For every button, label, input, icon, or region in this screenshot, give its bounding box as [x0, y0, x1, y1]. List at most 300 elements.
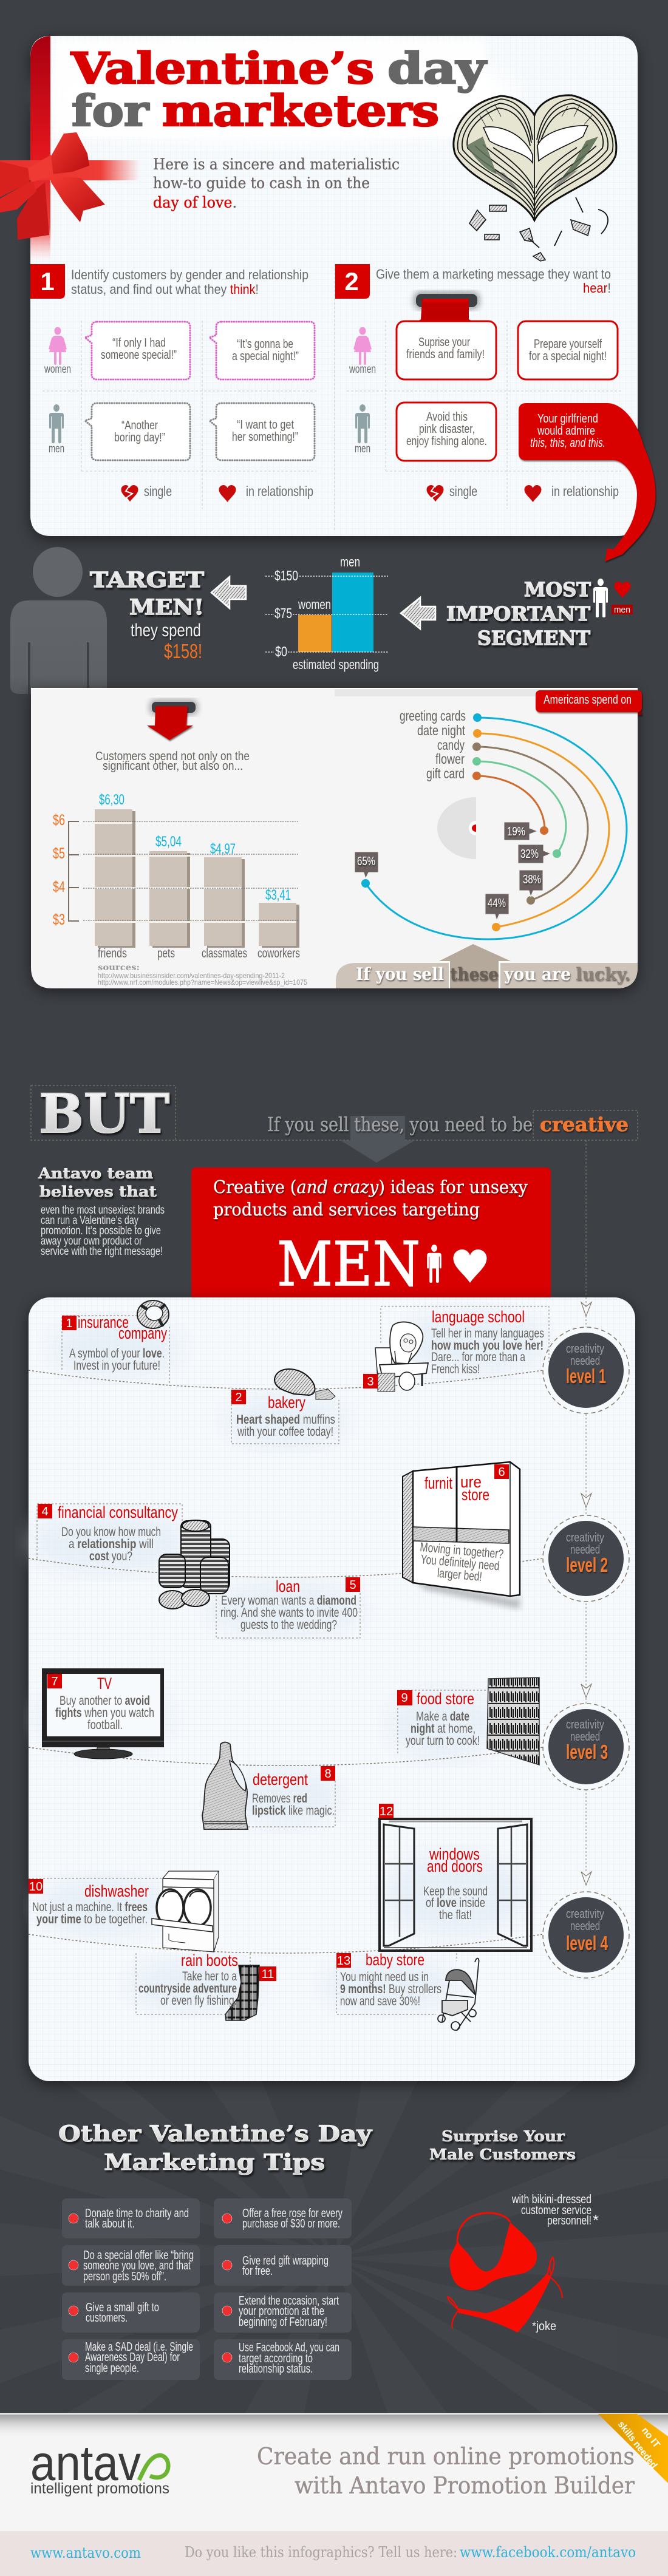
idea 10: dishwasher	[29, 1871, 219, 1952]
heading: target men: MEN!	[129, 595, 204, 620]
step text: hear!	[583, 280, 611, 296]
legend in relationship	[219, 483, 313, 502]
idea 1: insurance company: company	[118, 1324, 167, 1342]
idea 5: loan: 5	[349, 1579, 356, 1592]
text: antavo team: promotion. It’s possible to give	[41, 1225, 161, 1237]
tip cards: Extend the occasion, start	[239, 2294, 339, 2308]
speech bubble: “If only I had	[112, 336, 166, 350]
title: day	[387, 43, 488, 93]
section: but	[31, 1082, 638, 1300]
arc legend: candy	[437, 737, 465, 753]
speech bubble	[210, 403, 315, 460]
arrow: left	[401, 597, 435, 629]
tip cards: purchase of $30 or more.	[242, 2217, 340, 2231]
heading: most important segment	[446, 578, 591, 650]
bar chart: estimated spending	[265, 554, 388, 672]
speech bubble	[210, 322, 315, 379]
right half	[336, 690, 642, 988]
bar chart: estimated spending: men	[340, 554, 360, 569]
idea 7: tv: 7	[51, 1675, 58, 1688]
idea 4: financial consultancy: financial consultancy	[58, 1503, 178, 1521]
message box: enjoy fishing alone.	[406, 435, 487, 448]
tip cards: Offer a free rose for every	[242, 2207, 343, 2220]
idea 8: detergent: 8	[324, 1767, 332, 1781]
level 1: needed	[570, 1354, 600, 1368]
footer: links	[0, 2531, 668, 2576]
text: create and run	[257, 2443, 635, 2499]
banner: if you sell these: If you sell	[356, 964, 444, 984]
idea 12: windows and doors: the flat!	[439, 1908, 472, 1922]
icon: wardrobe	[403, 1462, 520, 1609]
banner: if you sell these: lucky.	[576, 964, 630, 984]
arc legend: date night	[417, 722, 465, 738]
bar chart: spending: pets	[157, 946, 175, 960]
title: for	[72, 86, 149, 136]
step text: Identify customers by gender and relationship	[71, 267, 308, 282]
text: customers spend	[95, 750, 250, 773]
legend single: single	[144, 483, 172, 499]
tip cards: Use Facebook Ad, you can	[239, 2341, 339, 2354]
icon: money heart	[454, 95, 616, 261]
message box	[397, 403, 496, 461]
speech bubble: her something!”	[232, 430, 298, 444]
idea 2: bakery: 2	[235, 1391, 242, 1404]
panel: creative ideas	[29, 1297, 635, 2081]
heading: surprise: Surprise Your	[441, 2127, 565, 2145]
icon: man	[49, 404, 64, 455]
icon: dishwasher	[152, 1871, 219, 1952]
text: create and run: with Antavo Promotion Builder	[295, 2472, 635, 2499]
step number	[335, 264, 370, 299]
footer: links: www.antavo.com	[30, 2544, 141, 2561]
level 3: needed	[570, 1730, 600, 1744]
bar chart: spending: $3,41	[265, 887, 291, 903]
icon: man: men	[49, 443, 64, 455]
text: customers spend: Customers spend not only on the	[95, 750, 250, 763]
idea 3: language school: Tell her in many languages	[431, 1327, 544, 1341]
icon: boot	[225, 1965, 259, 2020]
subtitle text: day of love.	[153, 194, 237, 211]
level 2: creativity	[566, 1531, 604, 1545]
subtitle text: Here is a sincere and materialistic	[153, 155, 400, 173]
idea 2: bakery: Heart shaped muffins	[236, 1413, 335, 1427]
icon: television	[42, 1668, 164, 1759]
bar chart: estimated spending: $75	[274, 605, 292, 621]
tip cards: person gets 50% off”.	[83, 2270, 166, 2283]
message box: Avoid this	[426, 410, 468, 424]
bar chart: spending: $5,04	[155, 834, 182, 850]
level 1: level 1	[566, 1365, 606, 1387]
step number	[30, 264, 65, 299]
idea 9: food store: 9	[401, 1691, 408, 1705]
idea 11: rain boots: rain boots	[181, 1951, 238, 1969]
step text: status, and find out what they think!	[71, 282, 259, 297]
arc chart	[366, 718, 627, 939]
heading: target men	[90, 568, 204, 662]
idea 3: language school: French kiss!	[431, 1362, 480, 1376]
tip cards: relationship status.	[239, 2362, 313, 2376]
ribbon vertical	[30, 36, 50, 261]
callouts: percentages: 19%	[507, 825, 525, 838]
legend single	[121, 483, 172, 503]
message box: pink disaster,	[419, 423, 475, 436]
arc legend: flower	[435, 751, 465, 767]
text: bikini: personnel!	[547, 2214, 591, 2228]
tip cards: for free.	[242, 2265, 273, 2278]
tip cards: single people.	[85, 2362, 139, 2375]
idea 11: rain boots: or even fly fishing.	[160, 1994, 237, 2008]
message box: friends and family!	[406, 348, 485, 361]
idea 3: language school: how much you love her!	[431, 1339, 544, 1353]
step 1: 1	[40, 267, 55, 296]
bar chart: spending: classmates	[202, 946, 247, 960]
arrow: big red curved arrow with message	[519, 403, 655, 562]
panel background	[30, 36, 638, 536]
arrow: big red curved arrow with message: Your girlfriend	[537, 412, 598, 426]
message box: for a special night!	[529, 350, 607, 363]
heading: surprise: Male Customers	[429, 2146, 576, 2163]
corner ribbon: no IT	[639, 2425, 662, 2450]
idea 4: financial consultancy: a relationship will	[69, 1537, 154, 1551]
callouts: percentages: 44%	[488, 897, 506, 910]
idea 9: food store	[397, 1677, 539, 1765]
half disc	[437, 797, 476, 859]
idea 1: insurance company: 1	[66, 1317, 73, 1330]
idea 3: language school: Dare... for more than a	[431, 1350, 525, 1364]
idea 1: insurance company: Invest in your future!	[73, 1359, 160, 1373]
tip cards: someone you love, and that	[83, 2259, 191, 2272]
idea 1: insurance company: A symbol of your love.	[69, 1347, 165, 1361]
footer: links: www.facebook.com/antavo	[460, 2544, 636, 2561]
idea 8: detergent: Removes red	[252, 1792, 307, 1806]
ribbon slot	[414, 291, 480, 322]
text: antavo team: service with the right message!	[41, 1245, 163, 1258]
speech bubble	[85, 403, 190, 460]
tip cards: Donate time to charity and	[85, 2207, 189, 2220]
icon: coins	[159, 1520, 230, 1609]
bar chart: estimated spending: $150	[274, 568, 298, 583]
level 3: level 3	[566, 1741, 608, 1763]
title: Valentine’s	[70, 43, 374, 93]
arrow: big red curved arrow with message: would admire	[537, 424, 595, 438]
level 2: level 2	[566, 1554, 608, 1576]
arc legend: greeting cards	[400, 708, 466, 724]
tip cards: Awareness Day Deal) for	[85, 2351, 180, 2364]
bar chart: spending: $6	[53, 812, 65, 829]
arrow: down	[340, 1116, 415, 1163]
legend single: single	[449, 483, 477, 499]
idea 6: furniture store	[403, 1462, 520, 1609]
callout: americans spend on	[536, 690, 642, 715]
footer: promotion	[0, 2413, 668, 2531]
idea 11: rain boots: Take her to a	[182, 1969, 237, 1983]
bar chart: spending: friends	[98, 946, 127, 960]
idea 9: food store: food store	[417, 1690, 474, 1708]
icon: ribbon bow	[0, 132, 140, 240]
panel: creative ideas red box: products and services targeting	[213, 1199, 480, 1220]
level 3: creativity	[566, 1718, 604, 1731]
idea 6: furniture store: Moving in together?	[420, 1540, 504, 1562]
idea 2: bakery	[231, 1369, 339, 1444]
subtitle text: how-to guide to cash in on the	[153, 174, 370, 192]
arrow: left	[211, 577, 246, 608]
callouts: percentages: 38%	[523, 873, 541, 886]
idea 13: baby store: 9 months! Buy strollers	[340, 1982, 441, 1996]
idea 5: loan	[216, 1577, 360, 1638]
legend in relationship: in relationship	[551, 483, 619, 499]
idea 11: rain boots	[136, 1951, 276, 2020]
arrow: big red curved arrow with message: this, this, and this.	[530, 437, 605, 450]
text: bikini	[511, 2193, 599, 2333]
idea 9: food store: night at home,	[411, 1722, 475, 1736]
banner: if you sell these	[336, 944, 638, 988]
idea 2: bakery: bakery	[268, 1393, 305, 1412]
message box	[518, 321, 618, 379]
idea 7: tv: football.	[87, 1718, 123, 1732]
message box	[397, 321, 496, 379]
footer: links: Do you like this infographics? Tell us here:	[185, 2544, 457, 2561]
panel: marketing tips	[58, 2121, 372, 2380]
bar chart: estimated spending: $0	[275, 644, 287, 659]
bar chart: spending: $4,97	[210, 841, 236, 857]
idea 5: loan: loan	[276, 1577, 300, 1596]
corner ribbon	[598, 2414, 668, 2483]
dashed matrix	[43, 321, 316, 509]
idea 13: baby store: 13	[337, 1954, 350, 1968]
text: antavo team: Antavo team	[38, 1164, 153, 1182]
subtitle text	[153, 155, 400, 211]
level 1	[543, 1327, 629, 1413]
idea 6: furniture store: larger bed!	[437, 1566, 483, 1584]
icon: life ring	[137, 1300, 169, 1328]
idea 8: detergent	[202, 1742, 335, 1829]
idea 13: baby store: baby store	[366, 1951, 424, 1969]
logo: antavo: intelligent promotions	[30, 2480, 169, 2497]
idea 10: dishwasher: Not just a machine. It frees	[32, 1900, 148, 1914]
idea 6: furniture store: 6	[498, 1466, 505, 1479]
speech bubble	[85, 322, 190, 379]
step text	[71, 267, 308, 297]
callout: americans spend on: Americans spend on	[544, 693, 632, 707]
speech bubble: boring day!”	[114, 431, 165, 444]
idea 9: food store: Make a date	[416, 1710, 469, 1724]
heading: other tips: Marketing Tips	[104, 2150, 325, 2175]
idea 11: rain boots: 11	[262, 1968, 274, 1981]
text: sources: http://www.nrf.com/modules.php?name=News&op=viewlive&sp_id=1075	[98, 978, 307, 987]
arc legend	[361, 708, 561, 931]
arc legend: gift card	[426, 766, 465, 781]
level 4: needed	[570, 1920, 600, 1933]
heading: target men: $158!	[164, 640, 202, 662]
tip cards: target according to	[239, 2352, 313, 2365]
heading: but: BUT	[39, 1082, 169, 1145]
text: creative: If you sell these, you need to be	[267, 1113, 533, 1136]
text: antavo team: away your own product or	[41, 1235, 143, 1248]
heading: surprise	[429, 2127, 576, 2163]
tip cards: customers.	[86, 2311, 128, 2325]
icon: student at desk	[375, 1322, 428, 1392]
idea 3: language school: language school	[432, 1308, 525, 1326]
panel: spending	[31, 688, 642, 988]
heading: most important segment: MOST	[524, 578, 591, 601]
callouts: percentages: 32%	[520, 848, 539, 861]
panel: surprise male customers	[429, 2127, 599, 2333]
idea 1: insurance company	[62, 1300, 169, 1386]
idea 13: baby store	[336, 1951, 479, 2031]
icon: bikini	[448, 2213, 562, 2333]
speech bubble: someone special!”	[101, 348, 177, 362]
icon: detergent bottle	[202, 1742, 248, 1829]
text: creative: creative	[540, 1113, 629, 1136]
title: marketers	[162, 86, 439, 136]
icon: woman: women	[349, 363, 376, 376]
idea 4: financial consultancy: Do you know how much	[61, 1525, 161, 1539]
banner: if you sell these: these	[450, 964, 499, 984]
banner: if you sell these: you are	[503, 964, 571, 984]
heading: target men: TARGET	[90, 568, 204, 593]
idea 6: furniture store: store	[462, 1486, 489, 1504]
left half	[53, 699, 307, 987]
panel: creative ideas red box: Creative (and crazy) ideas for unsexy	[213, 1177, 528, 1197]
idea 6: furniture store: ure	[460, 1473, 482, 1491]
bar chart: estimated spending: women	[298, 597, 331, 612]
legend single	[426, 483, 477, 503]
message box: Suprise your	[418, 336, 470, 349]
speech bubble: a special night!”	[232, 350, 299, 363]
icon: woman	[44, 327, 71, 376]
bar chart: spending: $5	[53, 845, 65, 862]
text: sources: sources:	[98, 963, 140, 973]
legend in relationship	[525, 483, 619, 502]
heading: other tips	[58, 2121, 372, 2175]
panel: creative ideas red box	[191, 1167, 551, 1300]
idea 3: language school	[363, 1307, 549, 1392]
tip cards: Do a special offer like “bring	[83, 2249, 194, 2262]
text: customers spend: significant other, but also on...	[103, 760, 243, 773]
heading: target men: they spend	[131, 620, 201, 641]
logo: antavo: antav	[30, 2436, 141, 2491]
idea 8: detergent: lipstick like magic.	[252, 1804, 335, 1818]
idea 11: rain boots: countryside adventure	[138, 1982, 237, 1996]
idea 5: loan: Every woman wants a diamond	[221, 1594, 356, 1608]
icon: red ribbon arrow	[147, 699, 198, 740]
idea 7: tv	[42, 1668, 164, 1759]
text: sources	[98, 963, 307, 987]
bar chart: spending: coworkers	[257, 946, 300, 960]
text: bikini: customer service	[521, 2204, 591, 2217]
idea 6: furniture store: You definitely need	[420, 1552, 500, 1573]
tip cards	[62, 2198, 352, 2380]
idea 5: loan: guests to the wedding?	[240, 1618, 337, 1632]
message box: Prepare yourself	[534, 338, 602, 351]
level 4: level 4	[566, 1932, 608, 1954]
idea 10: dishwasher: your time to be together.	[36, 1912, 148, 1926]
level 4: creativity	[566, 1908, 604, 1921]
idea 2: bakery: with your coffee today!	[237, 1425, 333, 1439]
legend in relationship: in relationship	[246, 483, 313, 499]
level 2	[543, 1515, 629, 1602]
dashed matrix	[347, 321, 621, 509]
text: antavo team	[38, 1164, 165, 1258]
icon: stroller	[438, 1959, 479, 2031]
text: sources: http://www.businessinsider.com/valentines-day-spending-2011-2	[98, 971, 285, 980]
step 1	[30, 264, 316, 509]
text: bikini: *	[593, 2211, 599, 2229]
tip cards: beginning of February!	[239, 2316, 327, 2329]
idea 10: dishwasher: 10	[29, 1880, 43, 1894]
idea 4: financial consultancy: 4	[41, 1505, 49, 1518]
corner ribbon: skills needed	[616, 2419, 659, 2471]
tip cards: Give red gift wrapping	[242, 2254, 329, 2268]
idea 12: windows and doors: windows	[429, 1845, 480, 1863]
level 3	[543, 1704, 629, 1790]
icon: woman: women	[44, 363, 71, 376]
step 2	[335, 264, 621, 530]
panel: intro and steps	[0, 36, 638, 536]
step text: Give them a marketing message they want to	[376, 267, 611, 282]
idea 5: loan: ring. And she wants to invite 400	[220, 1606, 358, 1620]
icon: bread	[274, 1369, 335, 1399]
icon: shelves	[487, 1677, 539, 1765]
speech bubble: “It’s gonna be	[237, 338, 293, 351]
idea 8: detergent: detergent	[253, 1770, 308, 1789]
icon: man silhouette	[10, 547, 107, 694]
speech bubble: “I want to get	[237, 418, 294, 432]
tip cards: talk about it.	[85, 2217, 135, 2231]
idea 13: baby store: now and save 30%!	[340, 1994, 420, 2008]
tip cards: Make a SAD deal (i.e. Single	[85, 2340, 193, 2354]
text: antavo team: believes that	[39, 1183, 157, 1200]
idea 4: financial consultancy: cost you?	[89, 1549, 132, 1563]
title	[70, 43, 488, 136]
callouts: percentages: 65%	[357, 855, 375, 868]
bar chart: estimated spending: estimated spending	[293, 657, 379, 672]
idea 7: tv: Buy another to avoid	[60, 1694, 150, 1708]
text: antavo team: even the most unsexiest brands	[41, 1204, 165, 1217]
bar chart: spending: $4	[53, 878, 65, 895]
idea 12: windows and doors: Keep the sound	[423, 1884, 488, 1898]
dashed guide line	[29, 1297, 591, 1953]
level 4	[543, 1892, 629, 1978]
idea 9: food store: your turn to cook!	[406, 1734, 480, 1748]
text: bikini: *joke	[532, 2320, 556, 2333]
icon: man	[355, 404, 370, 455]
heading: other tips: Other Valentine’s Day	[58, 2121, 372, 2147]
bar chart: spending: $3	[53, 911, 65, 928]
level 1: creativity	[566, 1342, 604, 1356]
level 2: needed	[570, 1543, 600, 1557]
icon: man and heart	[593, 579, 633, 617]
tip cards: your promotion at the	[239, 2305, 324, 2318]
step text	[376, 267, 611, 296]
idea 12: windows and doors	[379, 1804, 531, 1951]
heading: most important segment: IMPORTANT	[446, 602, 590, 625]
icon: woman	[349, 327, 376, 376]
bar chart: spending: $6,30	[99, 792, 124, 808]
idea 6: furniture store: furnit	[424, 1474, 452, 1492]
idea 13: baby store: You might need us in	[340, 1970, 429, 1984]
idea 12: windows and doors: of love inside	[426, 1896, 485, 1910]
idea 10: dishwasher: dishwasher	[84, 1882, 149, 1900]
bar chart: spending	[53, 792, 300, 960]
idea 1: insurance company: insurance	[78, 1313, 129, 1331]
text: create and run: Create and run online promotions	[257, 2443, 635, 2470]
speech bubble: “Another	[121, 419, 158, 432]
scattered bills	[469, 205, 590, 261]
panel: creative ideas red box: MEN	[277, 1229, 420, 1300]
idea 3: language school: 3	[367, 1375, 374, 1388]
idea 12: windows and doors: 12	[380, 1805, 393, 1818]
